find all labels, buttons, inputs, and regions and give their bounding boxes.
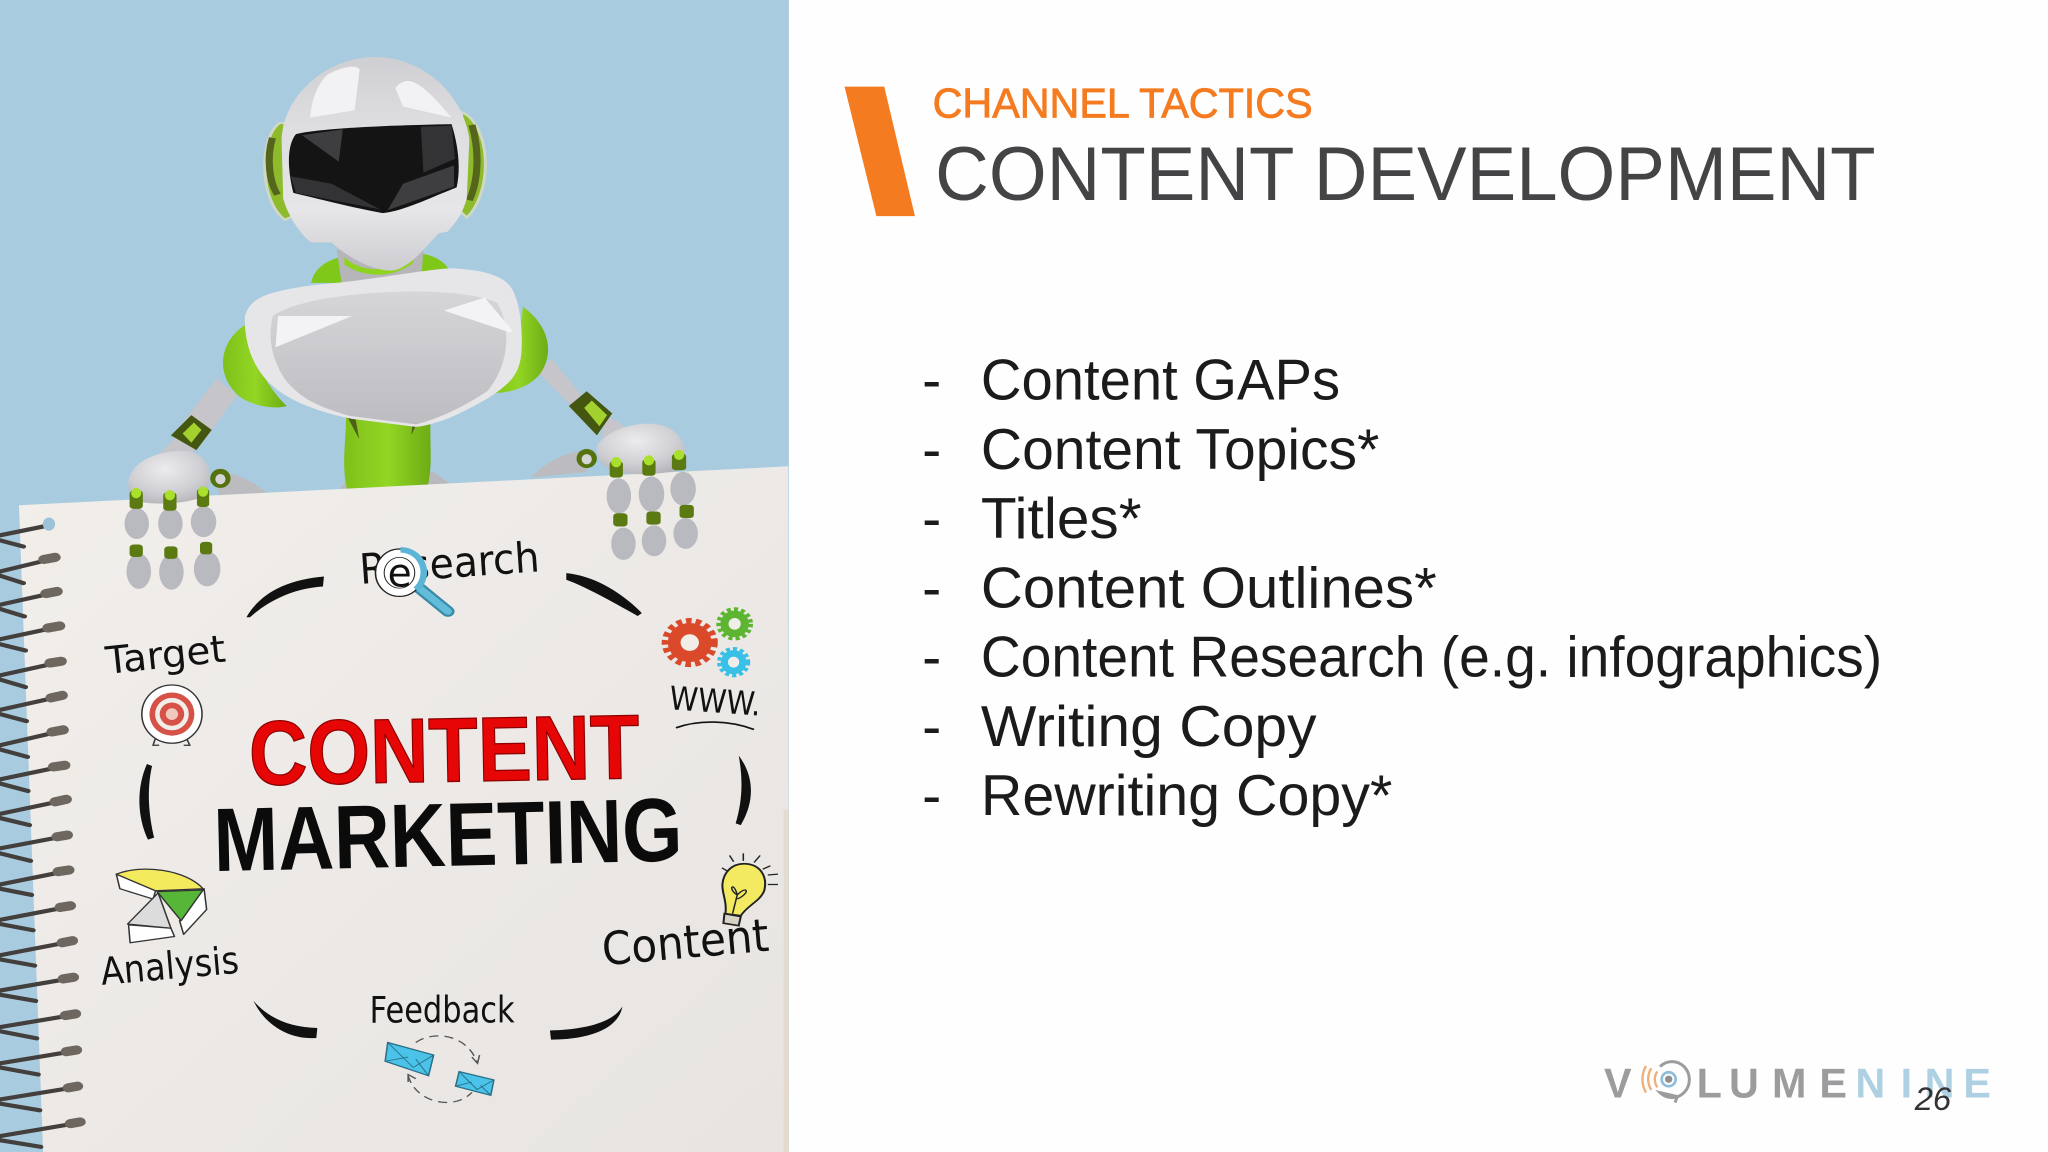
list item: Titles: Titles* [981, 487, 1142, 551]
notebook diagram artwork [116, 549, 778, 1103]
list item: Content Outlines: Content Outlines* [981, 556, 1437, 620]
right hand [597, 424, 685, 474]
notebook page [19, 466, 789, 1152]
left fingers [124, 486, 220, 590]
robot head [265, 57, 485, 271]
logo blue letters: NINE [1855, 1060, 1991, 1106]
icon: pie chart [116, 869, 207, 943]
notebook label: Analysis: Analysis [99, 938, 241, 994]
icon: light bulb [722, 853, 778, 926]
page number: 26 [1914, 1080, 1952, 1117]
icon: feedback envelopes [385, 1036, 494, 1103]
icon: www underline [676, 722, 754, 729]
panel: spiral notebook [0, 466, 789, 1152]
helmet highlights [310, 67, 452, 118]
list item: Rewriting Copy: - [922, 764, 941, 828]
bullet list [922, 349, 1882, 828]
robot neck and collar [311, 250, 450, 285]
list item: Content GAPs: - [922, 349, 941, 413]
list item: Content Topics: Content Topics* [981, 418, 1379, 482]
robot upper body behind notebook [153, 57, 633, 496]
notebook label: Feedback: Feedback [370, 989, 515, 1032]
robot hips [337, 472, 452, 494]
panel: sky blue image background [0, 0, 789, 1152]
robot wrist joints [171, 391, 612, 450]
headphones [265, 112, 485, 220]
visor [289, 124, 459, 213]
notebook label: www: WWW. [668, 679, 762, 724]
list item: Content Research: Content Research (e.g. infographics) [981, 626, 1882, 690]
notebook headline: MARKETING: MARKETING [212, 780, 683, 891]
notebook label: Research: Research [358, 532, 541, 594]
notebook label: Content: Content [600, 909, 771, 976]
list item: Writing Copy: Writing Copy [981, 695, 1317, 759]
right fingers [607, 450, 698, 560]
list item: Rewriting Copy: Rewriting Copy* [981, 764, 1392, 828]
list item: Titles: - [922, 487, 941, 551]
robot rear hands [210, 449, 597, 496]
notebook shaded right edge [784, 810, 789, 1152]
orange slash accent [845, 87, 915, 216]
magnifier letter e: e [388, 551, 412, 596]
logo: Volume Nine [1604, 1060, 1991, 1106]
notebook label: Target: Target [102, 627, 228, 683]
list item: Content Outlines: - [922, 556, 941, 620]
robot torso [245, 268, 522, 427]
left hand [128, 451, 210, 504]
heading: content development: CONTENT DEVELOPMENT [935, 132, 1876, 217]
spiral binding [0, 517, 80, 1147]
visor reflections [291, 126, 455, 210]
robot hands and fingers gripping notebook [124, 424, 698, 590]
robot waist [344, 412, 431, 489]
list item: Content Research: - [922, 626, 941, 690]
robot waist prongs [345, 410, 423, 439]
list item: Content GAPs: Content GAPs [981, 349, 1340, 413]
icon: target [142, 685, 202, 745]
helmet [282, 57, 469, 271]
notebook headline: CONTENT: CONTENT [248, 696, 640, 805]
cycle brush arcs [139, 573, 751, 1040]
heading: channel tactics: CHANNEL TACTICS [933, 80, 1313, 127]
logo icon: speech bubble target [1642, 1062, 1689, 1103]
icon: magnifying glass [375, 549, 448, 611]
logo gray letters: VLUME [1604, 1060, 1847, 1106]
robot arms [153, 358, 633, 463]
list item: Writing Copy: - [922, 695, 941, 759]
list item: Content Topics: - [922, 418, 941, 482]
icon: gears [665, 609, 750, 675]
robot shoulders [223, 307, 548, 407]
